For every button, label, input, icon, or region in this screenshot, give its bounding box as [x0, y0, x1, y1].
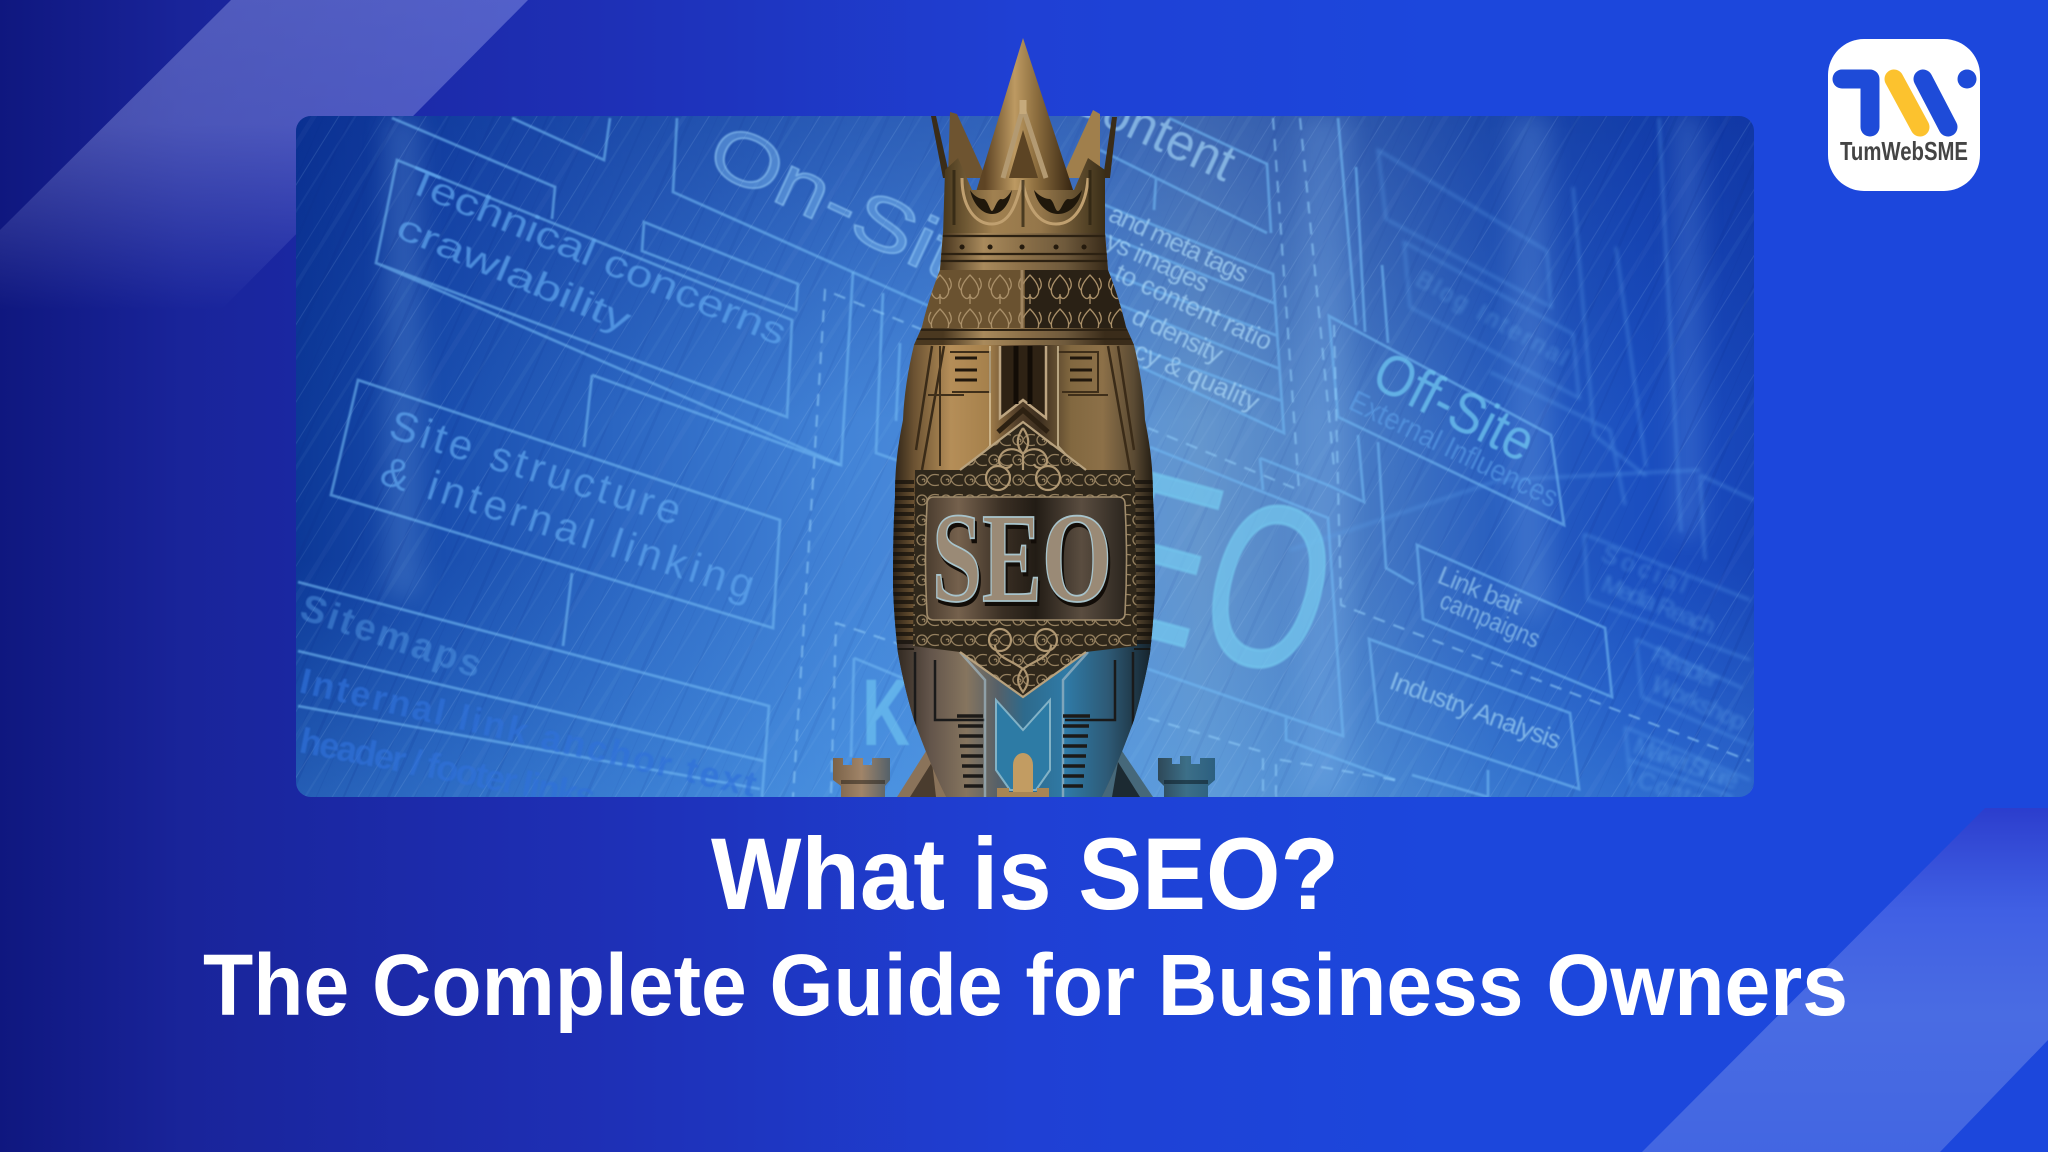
faint blurred labels: Market Share	[1630, 732, 1743, 795]
plaque ornament frame	[913, 422, 1137, 697]
blueprint labels: & internal linking	[375, 447, 760, 609]
dashed guide lines	[793, 118, 1750, 797]
blueprint labels: Site structure	[384, 401, 687, 534]
panel: SEO blueprint image	[296, 116, 1754, 797]
decorative diagonal band: top left	[0, 0, 528, 310]
blueprint labels: Internal link anchor text	[296, 660, 760, 805]
fleur ornament	[986, 428, 1060, 692]
blueprint labels: crawlability	[391, 206, 637, 341]
decorative diagonal band: bottom right	[1642, 808, 2048, 1152]
faint blurred labels: Media Reach	[1598, 571, 1719, 641]
blueprint diagram boxes and lines	[298, 118, 1612, 797]
crown band	[940, 233, 1110, 270]
blueprint labels: Off-Site	[1363, 339, 1546, 475]
hull edge ribbing	[890, 480, 1158, 650]
faint blurred labels: Blog Internal	[1411, 266, 1573, 372]
faint blurred labels: Contest	[1634, 766, 1728, 823]
blueprint labels: Content	[1061, 66, 1245, 193]
castle tower: left	[833, 758, 890, 797]
faint blurred labels: Social	[1598, 541, 1691, 599]
rocket fins	[897, 751, 1153, 797]
plaque SEO lettering: SEO	[934, 491, 1114, 633]
SEO plaque panel: SEO	[932, 487, 1112, 629]
blueprint labels: Industry Analysis	[1386, 665, 1565, 755]
blueprint labels: ys images	[1102, 225, 1214, 298]
faint blurred labels	[1411, 266, 1750, 823]
blueprint labels: On-Site	[696, 107, 1021, 318]
subtitle: The Complete Guide for Business Owners: The Complete Guide for Business Owners	[203, 937, 1848, 1034]
upper hull panels	[916, 346, 1134, 470]
logo wordmark: TumWebSME	[1840, 136, 1968, 166]
crown base and arches	[943, 158, 1105, 235]
blueprint labels: K	[862, 660, 910, 766]
blueprint labels: and meta tags	[1104, 198, 1253, 288]
title: What is SEO?: What is SEO?	[711, 817, 1339, 931]
filigree collar	[915, 270, 1135, 328]
blueprint labels: External Influences	[1344, 385, 1563, 514]
blueprint labels: Link bait	[1434, 560, 1527, 621]
collar band	[910, 328, 1140, 345]
faint blurred labels: Workshop	[1648, 671, 1750, 736]
faint far-right diagram lines	[1348, 118, 1754, 797]
blueprint labels: EO	[1079, 419, 1360, 727]
crown spikes	[931, 38, 1117, 205]
logo: TumWebSME badge	[1828, 39, 1980, 191]
lower hull	[896, 640, 1152, 797]
blueprint labels: Sitemaps	[295, 587, 487, 686]
blueprint labels: campaigns	[1436, 585, 1545, 654]
blueprint labels	[295, 66, 1565, 817]
blueprint labels: header / footer links	[296, 720, 599, 817]
faint blurred labels: Reader	[1648, 641, 1722, 694]
castle tower: right	[1158, 756, 1215, 797]
blueprint labels: Technical concerns	[402, 160, 793, 354]
rocket body	[885, 225, 1165, 805]
icon: bronze SEO rocket with crown	[833, 38, 1215, 805]
blueprint labels: cy & quality	[1130, 335, 1264, 417]
logo mark	[1842, 70, 1976, 127]
blueprint labels: d density	[1127, 300, 1228, 369]
blueprint labels: to content ratio	[1110, 257, 1277, 356]
SEO plaque panel	[924, 496, 1128, 621]
